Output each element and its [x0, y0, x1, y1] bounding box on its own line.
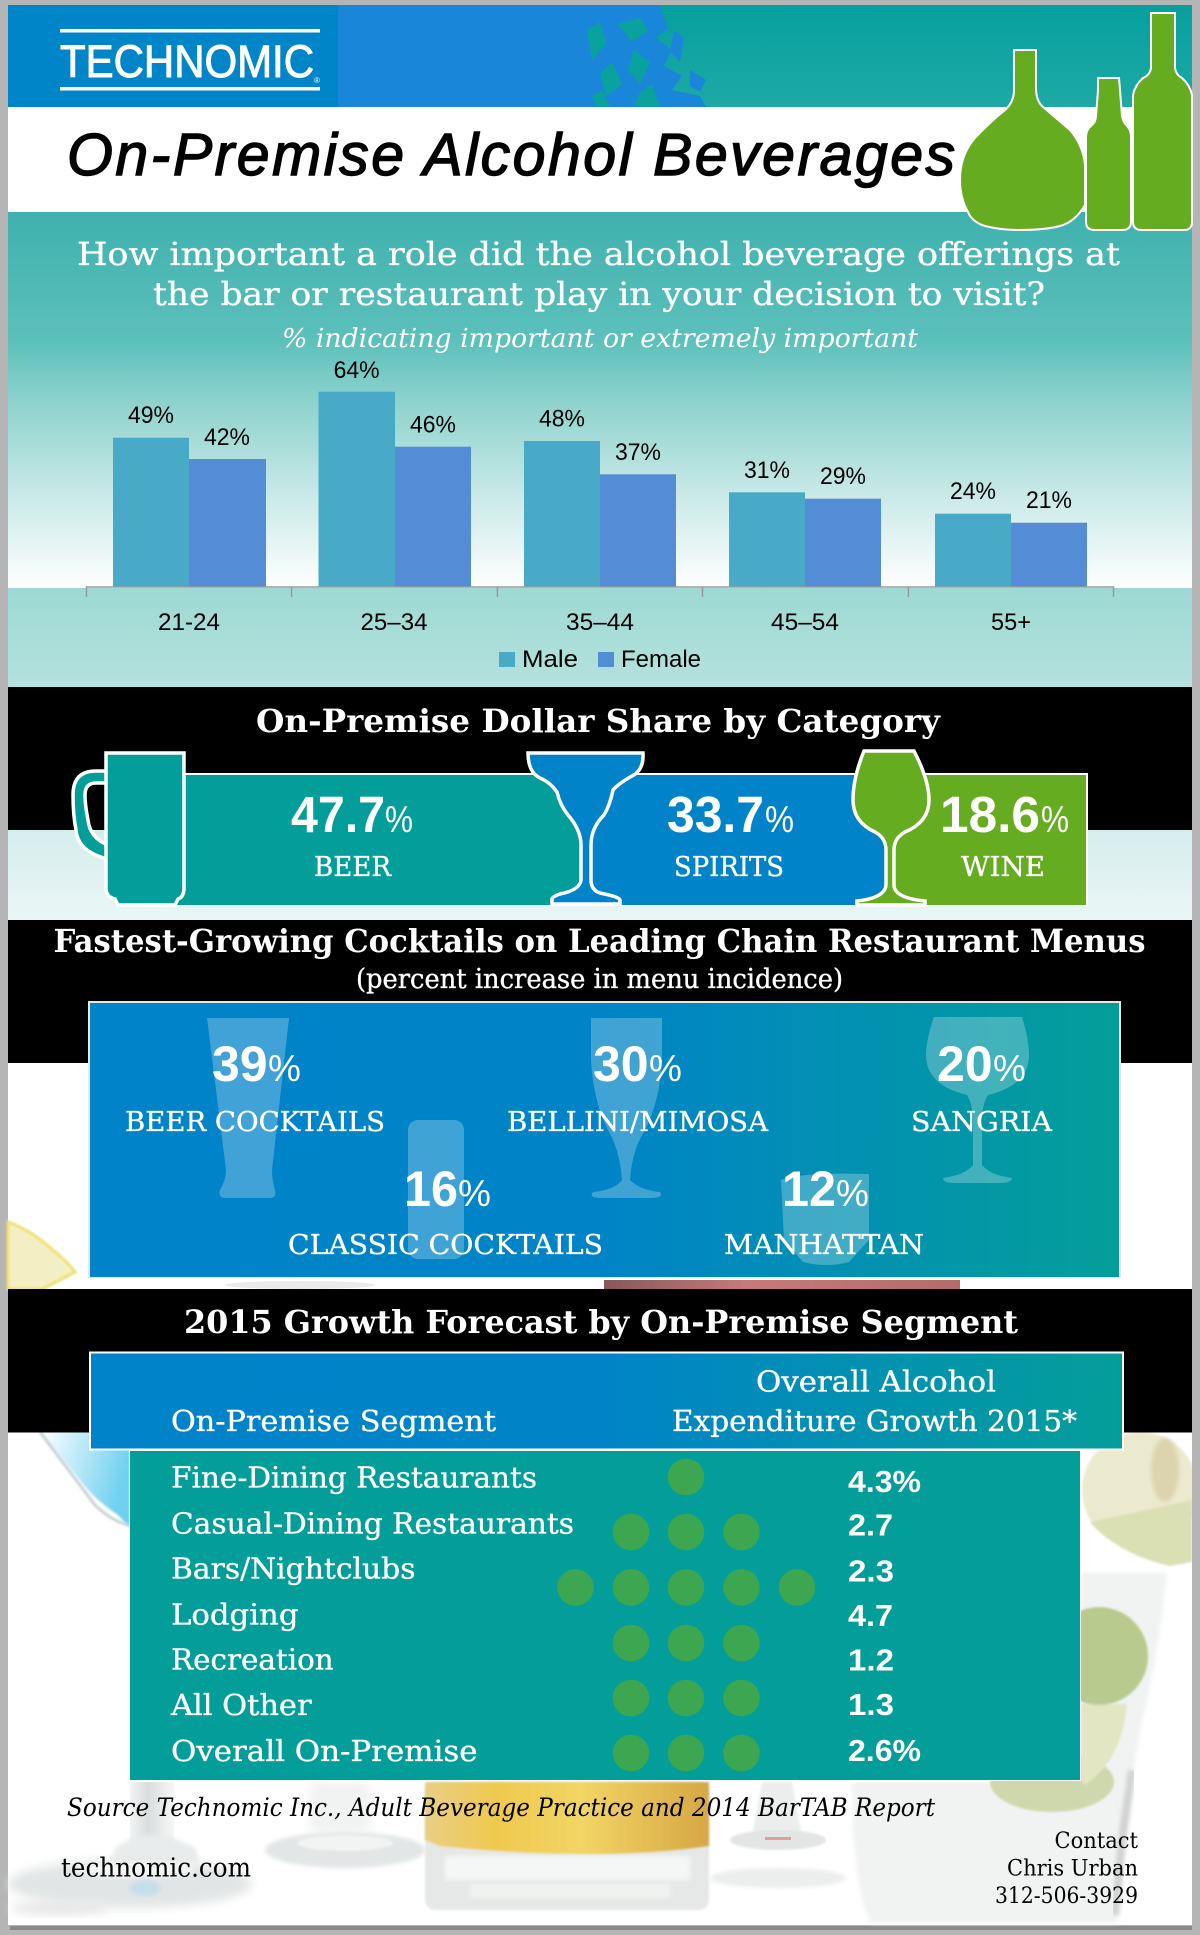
stat: classic cocktails: 16 — [404, 1161, 458, 1217]
segment labels: Bars/Nightclubs — [171, 1552, 416, 1586]
wine share: % — [1041, 799, 1069, 840]
segment labels: Lodging — [171, 1598, 298, 1632]
beer tumbler — [425, 1782, 709, 1910]
stat: bellini mimosa: % — [649, 1048, 682, 1089]
bar chart: 35–44 — [566, 609, 634, 636]
contact: 312-506-3929 — [995, 1884, 1138, 1909]
logo: ® — [314, 76, 320, 85]
heading: cocktails: (percent increase in menu incidence) — [356, 964, 843, 995]
icon: cocktail coupe — [528, 753, 643, 904]
stat: manhattan: % — [836, 1173, 869, 1214]
decorative mosaic — [587, 18, 706, 107]
bar chart: 42% — [204, 424, 250, 451]
bar chart — [86, 357, 1114, 673]
segment labels: Overall On-Premise — [171, 1734, 478, 1768]
right tumbler — [852, 1573, 1167, 1923]
growth values: 2.3 — [848, 1554, 894, 1589]
legend — [499, 646, 701, 673]
segment labels: All Other — [170, 1688, 312, 1722]
segment labels — [170, 1460, 574, 1768]
stat: beer cocktails: BEER COCKTAILS — [125, 1107, 385, 1138]
spirits share: % — [765, 799, 794, 840]
beer share: BEER — [314, 852, 392, 883]
stat: classic cocktails: CLASSIC COCKTAILS — [288, 1230, 603, 1261]
icon: bottles — [960, 13, 1192, 230]
growth values: 2.7 — [848, 1508, 893, 1543]
table header: Overall Alcohol — [756, 1364, 996, 1398]
bar chart: 21-24 — [158, 609, 220, 636]
chart section background — [8, 212, 1192, 687]
footer photo background — [8, 1432, 1200, 1935]
stat: bellini mimosa: 30 — [593, 1036, 649, 1092]
bar chart: 55+ — [991, 609, 1031, 636]
table header: Expenditure Growth 2015* — [672, 1404, 1077, 1438]
stat: sangria — [911, 1036, 1053, 1138]
dot pictogram — [557, 1459, 815, 1771]
bar chart: 25–34 — [360, 609, 428, 636]
panel: dollar share bar — [73, 751, 1088, 906]
contact: Contact — [1054, 1829, 1138, 1854]
beer share: % — [385, 799, 413, 840]
website: technomic.com — [61, 1854, 251, 1884]
spirits share — [667, 786, 794, 883]
bar chart: 49% — [128, 402, 174, 429]
heading: cocktails: Fastest-Growing Cocktails on Leading Chain Restaurant Menus — [54, 922, 1146, 960]
panel: cocktails background — [8, 920, 1192, 1289]
heading: forecast: 2015 Growth Forecast by On-Premise Segment — [184, 1303, 1018, 1341]
contact: Chris Urban — [1007, 1856, 1138, 1882]
stat: sangria: SANGRIA — [911, 1107, 1053, 1138]
bar chart: 21% — [1026, 487, 1072, 514]
segment labels: Fine-Dining Restaurants — [171, 1460, 537, 1494]
stat: sangria: % — [993, 1048, 1026, 1089]
wine share: 18.6 — [940, 786, 1040, 843]
question heading — [77, 235, 1120, 354]
source note: Source Technomic Inc., Adult Beverage Practice and 2014 BarTAB Report — [67, 1793, 936, 1822]
title band: On-Premise Alcohol Beverages — [67, 122, 955, 188]
lime slice — [1082, 1432, 1198, 1548]
stat: bellini mimosa: BELLINI/MIMOSA — [507, 1107, 769, 1138]
panel: forecast band — [8, 1289, 1192, 1432]
beer share: 47.7 — [291, 786, 385, 843]
growth values: 2.6% — [848, 1733, 921, 1768]
question heading: the bar or restaurant play in your decision to visit? — [153, 275, 1045, 313]
panel: forecast table — [129, 1450, 1081, 1781]
stat: bellini mimosa — [507, 1036, 769, 1138]
bar chart: 37% — [615, 439, 661, 466]
bar chart: 48% — [539, 406, 585, 433]
beer share — [291, 786, 413, 883]
question heading: % indicating important or extremely important — [282, 324, 919, 354]
heading: cocktails — [54, 922, 1146, 995]
stat: manhattan: MANHATTAN — [724, 1230, 924, 1261]
stat: classic cocktails — [288, 1161, 603, 1261]
stat: manhattan — [724, 1161, 924, 1261]
martini glass — [40, 1432, 130, 1528]
growth values: 1.2 — [848, 1643, 894, 1678]
spirits share: SPIRITS — [674, 852, 784, 883]
stat: beer cocktails: 39 — [212, 1036, 268, 1092]
table header — [89, 1352, 1124, 1450]
stat: sangria: 20 — [937, 1036, 993, 1092]
stat: classic cocktails: % — [458, 1173, 491, 1214]
stat: beer cocktails — [125, 1036, 385, 1138]
logo: TECHNOMIC — [60, 36, 314, 87]
segment labels: Casual-Dining Restaurants — [171, 1506, 574, 1540]
segment labels: Recreation — [171, 1643, 334, 1677]
bar chart: 64% — [334, 357, 380, 384]
bar chart: 29% — [820, 463, 866, 490]
spirits share: 33.7 — [667, 786, 764, 843]
second glass — [310, 1782, 370, 1832]
bar chart: 45–54 — [771, 609, 839, 636]
growth values — [848, 1464, 921, 1768]
icon: beer mug — [73, 753, 184, 905]
panel: cocktail growth — [88, 1001, 1121, 1278]
bar chart: 46% — [410, 412, 456, 439]
question heading: How important a role did the alcohol beverage offerings at — [77, 235, 1120, 273]
heading: dollar share: On-Premise Dollar Share by Category — [256, 702, 941, 740]
icon: wine glass — [853, 751, 929, 905]
contact — [995, 1829, 1138, 1909]
growth values: 1.3 — [848, 1687, 894, 1722]
panel: dollar share background — [8, 687, 1192, 920]
lemon slice — [8, 1222, 75, 1289]
table header: On-Premise Segment — [171, 1404, 496, 1438]
bar chart: 31% — [744, 457, 790, 484]
wine share — [940, 786, 1069, 883]
legend: Female — [621, 646, 701, 673]
ghost glasses — [207, 1017, 1029, 1265]
bar chart: 24% — [950, 478, 996, 505]
title band — [8, 107, 1192, 212]
stat: manhattan: 12 — [782, 1161, 836, 1217]
stat: beer cocktails: % — [268, 1048, 301, 1089]
third glass — [752, 1782, 802, 1836]
wine share: WINE — [961, 852, 1045, 883]
legend: Male — [522, 646, 578, 673]
growth values: 4.7 — [848, 1598, 893, 1633]
header band — [8, 5, 1192, 107]
growth values: 4.3% — [848, 1464, 921, 1499]
